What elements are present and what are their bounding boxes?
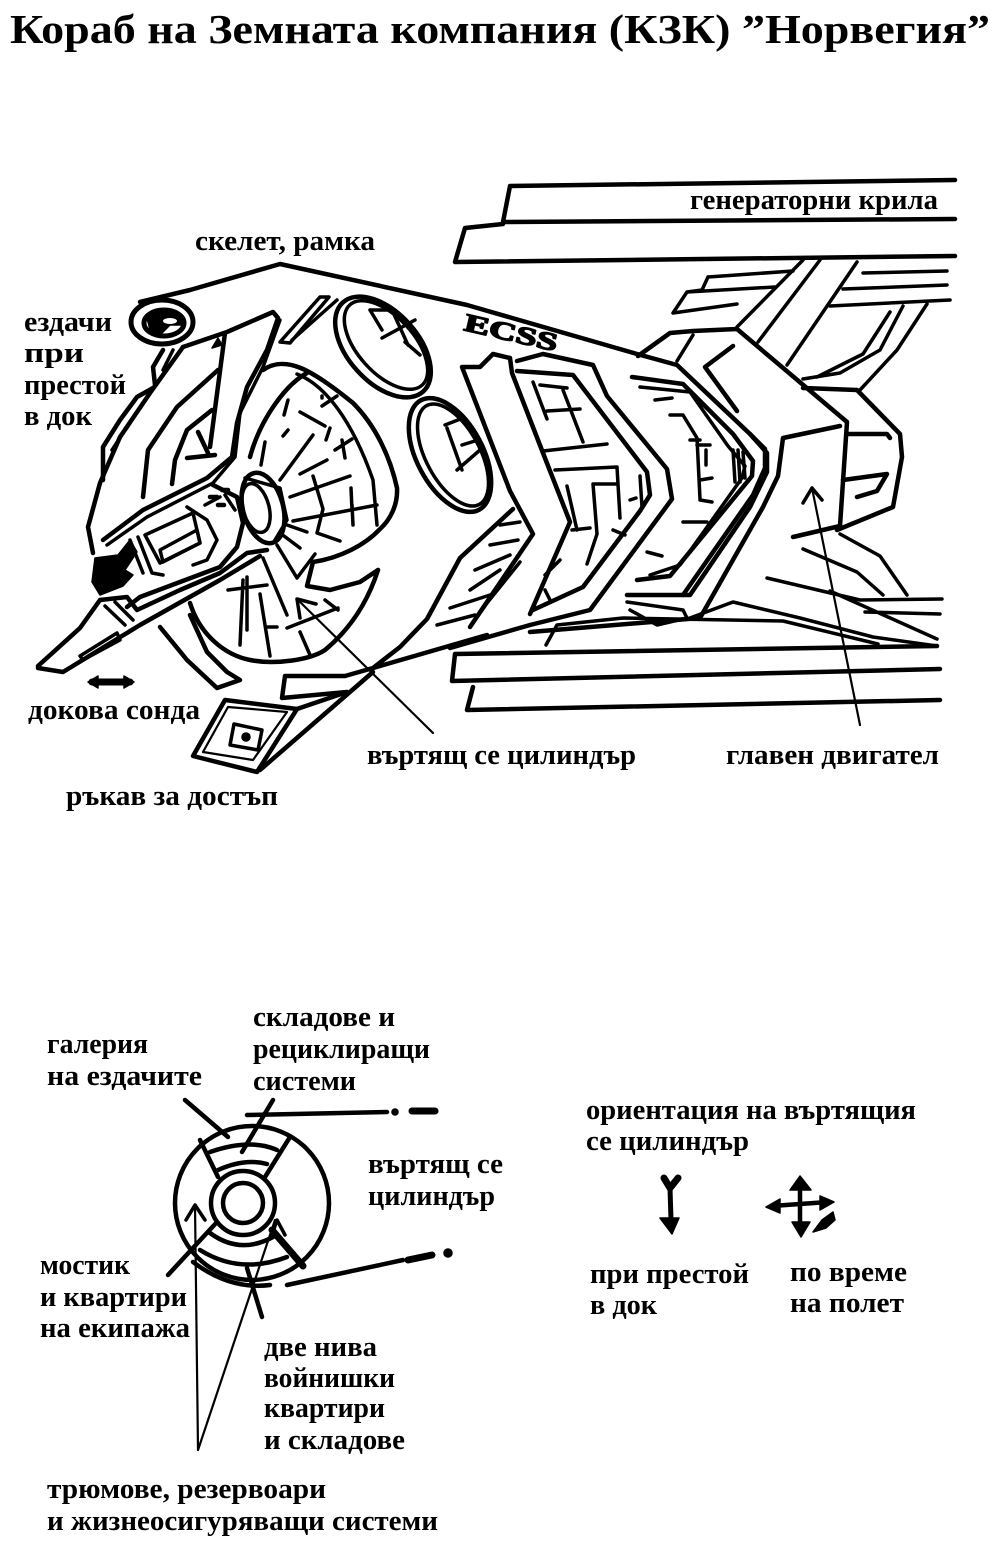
icon: in-flight orientation arrows: [766, 1176, 835, 1237]
label: docked riders: престой: [24, 370, 126, 401]
label: riders gallery: на ездачите: [47, 1061, 202, 1092]
first midship bay: [517, 354, 672, 625]
title: Кораб на Земната компания (КЗК) ”Норвегия”: [10, 6, 990, 52]
label: storage and recycling: [253, 1002, 430, 1097]
label: when docked: в док: [590, 1290, 658, 1321]
label: docking probe: докова сонда: [28, 695, 200, 726]
label: soldier quarters: и складове: [264, 1425, 405, 1456]
label: during flight: по време: [790, 1257, 907, 1288]
rotating cylinder, lower half: [160, 558, 378, 688]
lower left side panel: [373, 509, 520, 668]
chart: cross-section of rotating cylinder: [168, 1100, 452, 1450]
generator wings, top: [455, 180, 955, 365]
label: bridge and crew quarters: на екипажа: [40, 1313, 190, 1344]
label: soldier quarters: [264, 1332, 405, 1456]
label: soldier quarters: две нива: [264, 1332, 377, 1363]
label: holds and life support: трюмове, резервоари: [47, 1474, 326, 1505]
lower generator wings: [452, 534, 942, 710]
hub rings: [211, 1171, 275, 1235]
label: access sleeve: ръкав за достъп: [66, 781, 278, 812]
label: storage and recycling: рециклиращи: [253, 1034, 430, 1065]
outer circle: [175, 1126, 329, 1280]
label: storage and recycling: системи: [253, 1066, 356, 1097]
label: holds and life support: [47, 1474, 438, 1537]
label: rotating cylinder: въртящ се цилиндър: [367, 740, 636, 771]
label: riders gallery: [47, 1029, 202, 1092]
pointer lines: [185, 1100, 273, 1317]
cylinder extension lines: [247, 1109, 452, 1285]
label: riders gallery: галерия: [47, 1029, 148, 1060]
label: when docked: [590, 1259, 749, 1321]
label: bridge and crew quarters: мостик: [40, 1250, 131, 1281]
lower sector: [168, 1222, 303, 1286]
arrow: docking probe motion: [88, 676, 134, 688]
label: soldier quarters: квартири: [264, 1393, 385, 1424]
arrow: rotating cylinder: [297, 599, 433, 733]
chart: ship illustration: [38, 180, 955, 772]
label: main engine: главен двигател: [726, 740, 939, 771]
label: bridge and crew quarters: и квартири: [40, 1282, 187, 1313]
hull windows: [317, 279, 508, 525]
label: bridge and crew quarters: [40, 1250, 190, 1344]
arrow: main engine: [803, 488, 860, 725]
second midship bay: [632, 377, 765, 595]
label: docked riders: в док: [24, 401, 93, 432]
label: during flight: [790, 1257, 907, 1319]
icon: docked orientation arrow: [660, 1178, 679, 1234]
label: frame: скелет, рамка: [195, 226, 375, 257]
label: cylinder orientation: ориентация на въртящия: [586, 1095, 916, 1126]
label: storage and recycling: складове и: [253, 1002, 395, 1033]
main engine block: [530, 304, 927, 632]
label: rotating cylinder: [368, 1149, 503, 1212]
label: rotating cylinder: въртящ се: [368, 1149, 503, 1180]
access sleeve: [193, 635, 487, 772]
label: soldier quarters: войнишки: [264, 1363, 395, 1394]
label: holds and life support: и жизнеосигуряващи системи: [47, 1506, 438, 1537]
hull outline: [88, 264, 767, 648]
label: during flight: на полет: [790, 1288, 904, 1319]
docked riders pod: [131, 300, 193, 344]
rotating cylinder, upper half: [250, 364, 397, 578]
label: generator wings: генераторни крила: [690, 185, 938, 216]
label: cylinder orientation: се цилиндър: [586, 1126, 749, 1157]
label: docked riders: при: [24, 338, 84, 369]
label: rotating cylinder: цилиндър: [368, 1181, 495, 1212]
label: docked riders: [24, 307, 126, 432]
label: when docked: при престой: [590, 1259, 749, 1290]
docking probe and forward tube: [38, 485, 267, 672]
label: docked riders: ездачи: [24, 307, 112, 338]
hub: [234, 468, 292, 548]
label: cylinder orientation: [586, 1095, 916, 1157]
arrows: holds and tanks: [186, 1205, 285, 1450]
upper sector: [200, 1137, 290, 1177]
ECSS hull marking: ECSS: [462, 310, 560, 357]
